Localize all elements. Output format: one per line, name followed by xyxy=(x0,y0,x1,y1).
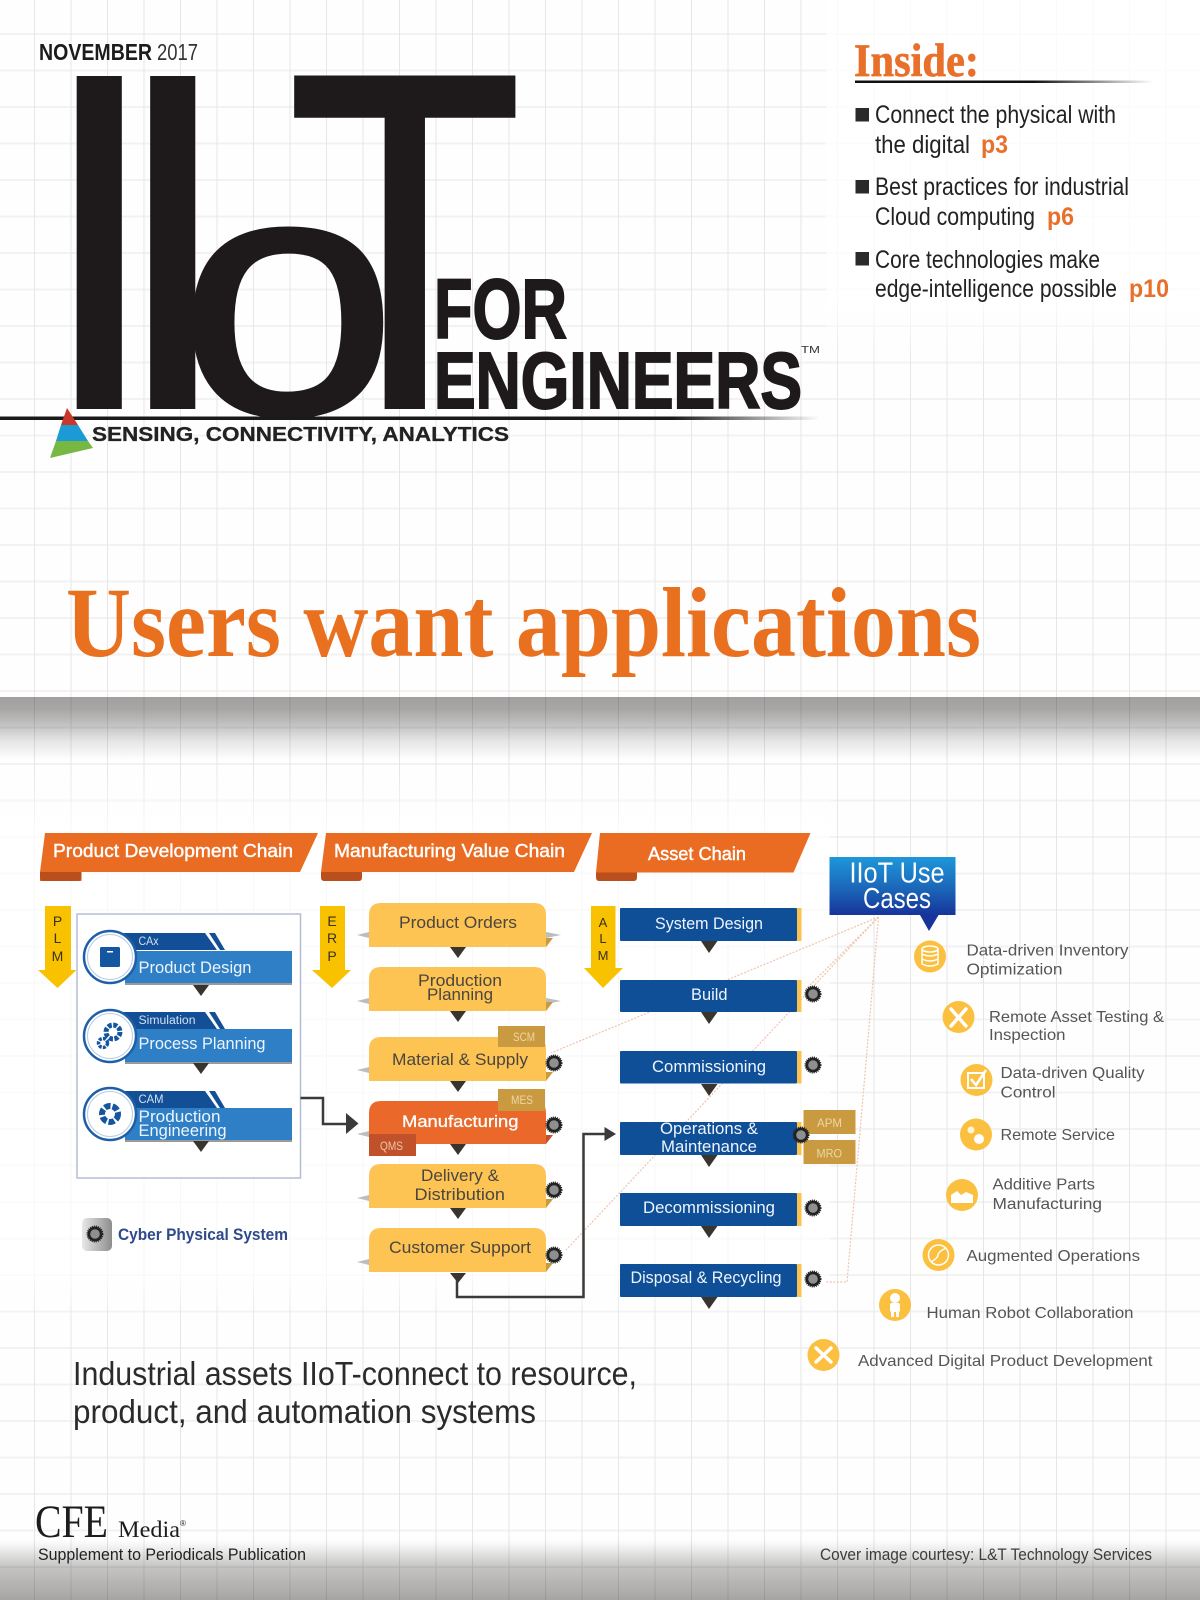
icon: checkbox xyxy=(968,1070,986,1088)
step: operations and maintenance xyxy=(620,1110,856,1167)
banner: manufacturing value chain xyxy=(321,833,592,881)
step: operations and maintenance: Operations & xyxy=(660,1119,759,1138)
legend: cyber physical system: Cyber Physical System xyxy=(118,1225,288,1244)
step: manufacturing: QMS xyxy=(380,1141,403,1153)
caption: product, and automation systems xyxy=(73,1393,536,1430)
step: manufacturing: MES xyxy=(511,1095,533,1107)
item: core technologies: Core technologies make xyxy=(875,246,1100,274)
banner: manufacturing value chain: Manufacturing Value Chain xyxy=(334,840,565,861)
step: delivery and distribution: Delivery & xyxy=(421,1166,500,1185)
icon: colour prism xyxy=(50,408,93,458)
diagram backing xyxy=(0,770,830,1320)
use case: advanced digital product development xyxy=(808,1339,1153,1371)
icon: gears xyxy=(98,1025,120,1048)
banner: asset chain xyxy=(596,833,810,881)
use case: quality control: Data-driven Quality xyxy=(1000,1065,1144,1082)
arrow: PLM: P xyxy=(53,913,62,929)
step: production planning xyxy=(357,967,561,1022)
step: production engineering: CAM xyxy=(138,1094,164,1106)
arrow: PLM: L xyxy=(54,930,62,946)
banner: product development chain xyxy=(40,833,318,881)
banner: product development chain: Product Development Chain xyxy=(53,840,293,861)
logo words FOR ENGINEERS: FOR xyxy=(434,262,567,356)
use case: remote service: Remote Service xyxy=(1000,1127,1115,1144)
callout: IIoT use cases xyxy=(830,857,956,931)
use case: additive manufacturing xyxy=(946,1176,1102,1213)
icon: printer xyxy=(951,1191,973,1203)
step: material and supply: SCM xyxy=(513,1032,535,1044)
step: process planning: Process Planning xyxy=(138,1034,266,1053)
step: operations and maintenance: APM xyxy=(817,1118,842,1130)
step: build xyxy=(620,980,820,1024)
step: production engineering xyxy=(84,1088,292,1152)
headline: Users want applications xyxy=(66,567,981,678)
diagram xyxy=(38,833,1164,1371)
arrow: ERP: E xyxy=(327,913,337,929)
logo letters IIoT: o xyxy=(179,103,397,486)
icon: database xyxy=(922,946,938,966)
step: material and supply xyxy=(357,1026,562,1092)
icon: crossed tools xyxy=(816,1348,831,1362)
step: delivery and distribution: Distribution xyxy=(414,1185,505,1204)
use case: remote service xyxy=(960,1118,1115,1150)
arrow: PLM: M xyxy=(52,948,63,964)
caption xyxy=(73,1355,637,1430)
banner: asset chain: Asset Chain xyxy=(648,843,746,864)
item: connect: p3 xyxy=(981,131,1008,159)
step: system design xyxy=(620,908,802,953)
item: best practices: p6 xyxy=(1047,203,1074,231)
step: disposal and recycling xyxy=(620,1264,820,1309)
item: core technologies xyxy=(856,246,1169,303)
step: process planning: Simulation xyxy=(138,1015,196,1027)
dotted links to use cases xyxy=(551,917,878,1282)
use case: remote testing: Inspection xyxy=(989,1027,1066,1044)
use case: quality control: Control xyxy=(1000,1084,1056,1102)
item: connect: the digital xyxy=(875,131,970,159)
icon: robot xyxy=(890,1293,900,1317)
arrow: ERP xyxy=(312,906,351,988)
use case: remote testing xyxy=(942,1001,1164,1044)
trademark: TM xyxy=(801,345,820,356)
arrow: ALM: A xyxy=(599,915,608,930)
legend: cyber physical system xyxy=(82,1218,288,1251)
arrow: ALM: L xyxy=(599,931,607,946)
item: core technologies: p10 xyxy=(1129,275,1169,303)
logo words FOR ENGINEERS xyxy=(434,262,802,425)
use case: augmented operations xyxy=(922,1239,1140,1271)
use case: augmented operations: Augmented Operations xyxy=(966,1248,1140,1265)
publisher logo: CFE xyxy=(35,1496,108,1548)
tagline: SENSING, CONNECTIVITY, ANALYTICS xyxy=(92,424,509,446)
step: operations and maintenance: MRO xyxy=(816,1148,842,1160)
arrow: support to operations xyxy=(457,1127,616,1297)
use case: inventory xyxy=(914,940,1128,978)
masthead logo xyxy=(0,0,820,512)
callout: IIoT use cases: IIoT Use xyxy=(850,858,944,890)
step: commissioning: Commissioning xyxy=(652,1057,766,1076)
date line: 2017 xyxy=(157,39,198,65)
arrow: ERP: P xyxy=(327,948,337,964)
use case: additive manufacturing: Additive Parts xyxy=(992,1176,1095,1194)
shaded band xyxy=(0,697,1200,769)
item: core technologies: edge-intelligence possible xyxy=(875,275,1117,303)
panel: inside contents xyxy=(854,35,1169,303)
step: product orders xyxy=(357,903,561,958)
masthead rule xyxy=(0,416,820,420)
inside rule xyxy=(855,80,1153,83)
icon: box xyxy=(100,947,120,967)
step: manufacturing xyxy=(357,1089,562,1156)
cover credit: Cover image courtesy: L&T Technology Services xyxy=(820,1546,1152,1564)
item: connect xyxy=(856,101,1116,159)
step: operations and maintenance: Maintenance xyxy=(661,1137,757,1156)
use case: quality control xyxy=(960,1064,1144,1102)
callout: IIoT use cases: Cases xyxy=(863,883,931,915)
step: commissioning xyxy=(620,1051,820,1096)
use case: advanced digital product development: Advanced Digital Product Development xyxy=(858,1353,1153,1370)
logo words FOR ENGINEERS: ENGINEERS xyxy=(434,336,802,425)
step: material and supply: Material & Supply xyxy=(392,1050,529,1069)
icon: service cog xyxy=(968,1126,984,1144)
step: production engineering: Engineering xyxy=(138,1121,226,1140)
use case: additive manufacturing: Manufacturing xyxy=(992,1196,1102,1213)
icon: cog xyxy=(102,1106,118,1122)
date line: NOVEMBER xyxy=(39,39,152,65)
publication note: Supplement to Periodicals Publication xyxy=(38,1546,306,1564)
arrow: ERP: R xyxy=(327,930,337,946)
icon: swirl xyxy=(928,1245,948,1265)
inside heading: Inside: xyxy=(854,35,979,87)
use case: inventory: Optimization xyxy=(966,962,1062,978)
use case: human robot collaboration: Human Robot Collaboration xyxy=(926,1305,1134,1322)
step: disposal and recycling: Disposal & Recycling xyxy=(630,1268,782,1287)
publisher logo: Media xyxy=(118,1517,180,1542)
icon: tools xyxy=(951,1009,966,1026)
step: delivery and distribution xyxy=(357,1164,562,1219)
publisher logo: ® xyxy=(180,1519,186,1528)
step: product design: CAx xyxy=(138,936,159,948)
step: manufacturing: Manufacturing xyxy=(402,1112,518,1131)
use case: human robot collaboration xyxy=(879,1289,1134,1322)
step: process planning xyxy=(84,1010,292,1074)
arrow: ALM xyxy=(584,906,623,988)
step: customer support xyxy=(357,1228,562,1283)
logo letters IIoT xyxy=(32,0,522,512)
step: decommissioning xyxy=(620,1193,820,1238)
step: production planning: Production xyxy=(418,971,502,990)
step: production planning: Planning xyxy=(427,985,493,1004)
use case: remote testing: Remote Asset Testing & xyxy=(989,1009,1164,1026)
arrow: product to manufacturing xyxy=(300,1098,358,1134)
use case: inventory: Data-driven Inventory xyxy=(966,942,1128,960)
panel: product development box xyxy=(77,914,300,1178)
step: product design: Product Design xyxy=(138,958,252,977)
step: product orders: Product Orders xyxy=(399,913,517,932)
item: best practices: Best practices for industrial xyxy=(875,173,1129,201)
footer shading xyxy=(0,1540,1200,1600)
arrow: PLM xyxy=(38,906,76,988)
step: build: Build xyxy=(691,985,728,1004)
publisher logo xyxy=(35,1496,186,1548)
step: decommissioning: Decommissioning xyxy=(643,1198,775,1217)
item: best practices: Cloud computing xyxy=(875,203,1035,231)
step: system design: System Design xyxy=(655,914,763,933)
caption: Industrial assets IIoT-connect to resource, xyxy=(73,1355,637,1392)
item: connect: Connect the physical with xyxy=(875,101,1116,129)
step: product design xyxy=(84,931,292,996)
step: production engineering: Production xyxy=(138,1107,220,1126)
arrow: ALM: M xyxy=(598,948,608,963)
item: best practices xyxy=(856,173,1129,231)
step: customer support: Customer Support xyxy=(389,1238,531,1257)
